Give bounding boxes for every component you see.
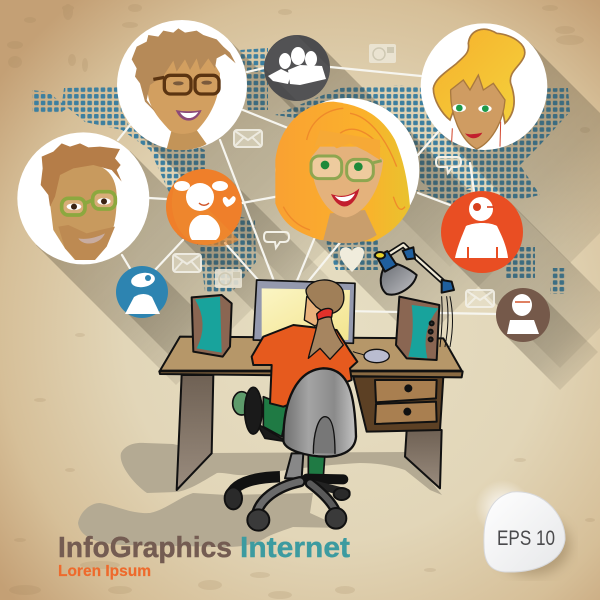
man with glasses portrait <box>117 20 247 150</box>
white disc <box>117 20 247 150</box>
green glasses <box>311 156 382 181</box>
chair base <box>225 453 350 531</box>
icon: chat bubble <box>436 157 461 173</box>
eye whites <box>67 198 111 210</box>
hair strands <box>283 108 405 230</box>
dotted world map <box>30 45 575 300</box>
floor shadow of desk <box>78 443 442 547</box>
desk left leg <box>177 375 213 490</box>
hair <box>41 143 122 207</box>
blue avatar <box>116 266 168 318</box>
icon: heart <box>340 247 364 272</box>
icon: envelope <box>173 254 201 272</box>
earrings <box>452 122 501 147</box>
white disc <box>275 98 419 242</box>
Internet word: Internet <box>240 532 350 564</box>
beard <box>58 225 115 260</box>
desk top <box>159 337 463 377</box>
subtitle: Loren Ipsum <box>58 563 151 580</box>
face <box>50 163 117 260</box>
brown avatar <box>496 288 550 342</box>
EPS 10 badge <box>475 480 570 575</box>
InfoGraphics word: InfoGraphics <box>58 532 232 564</box>
eyes <box>173 81 212 85</box>
hair <box>132 28 236 113</box>
icon: envelope <box>466 290 494 307</box>
long shadows of circles <box>36 39 600 390</box>
irises <box>456 105 489 112</box>
desk lamp <box>375 245 454 347</box>
face <box>312 147 383 217</box>
brown hair and ponytail <box>306 280 344 359</box>
network connection lines <box>118 67 497 314</box>
white disc <box>421 23 547 150</box>
desk right leg <box>405 430 442 488</box>
right speaker <box>396 297 439 360</box>
green glasses <box>62 192 115 215</box>
office chair <box>225 368 356 531</box>
big blonde woman portrait <box>275 98 419 243</box>
orange jumper <box>252 325 357 407</box>
hair <box>433 29 525 123</box>
drawer unit <box>353 377 443 432</box>
monitor <box>253 280 355 343</box>
icon: envelope <box>234 130 262 147</box>
EPS 10 badge: EPS 10 <box>497 527 555 550</box>
glasses <box>153 75 219 94</box>
eye whites <box>453 104 492 112</box>
blonde updo woman portrait <box>421 23 547 150</box>
team badge icon <box>264 35 330 101</box>
bearded man portrait <box>17 132 149 264</box>
face <box>148 57 220 134</box>
lips <box>465 133 482 138</box>
eyes <box>71 198 107 210</box>
face <box>451 75 505 149</box>
hair <box>275 102 410 242</box>
chair backrest <box>283 368 356 457</box>
icon: chat bubble <box>264 232 289 248</box>
icon: camera <box>215 269 242 288</box>
smile <box>176 110 202 121</box>
eyes <box>321 161 363 171</box>
left speaker <box>192 295 232 357</box>
white disc <box>17 132 149 264</box>
smile <box>331 188 359 206</box>
neck <box>167 130 207 150</box>
orange girl avatar <box>166 169 242 246</box>
girl sitting <box>233 280 357 477</box>
red winking avatar <box>441 191 523 273</box>
title <box>58 532 350 564</box>
smile <box>78 233 105 244</box>
desk scene <box>159 245 463 531</box>
head <box>304 297 323 326</box>
icon: camera <box>369 44 396 63</box>
fringe <box>313 130 380 160</box>
mouse <box>353 349 389 363</box>
green trousers and foot <box>233 387 325 477</box>
neck <box>323 210 377 243</box>
